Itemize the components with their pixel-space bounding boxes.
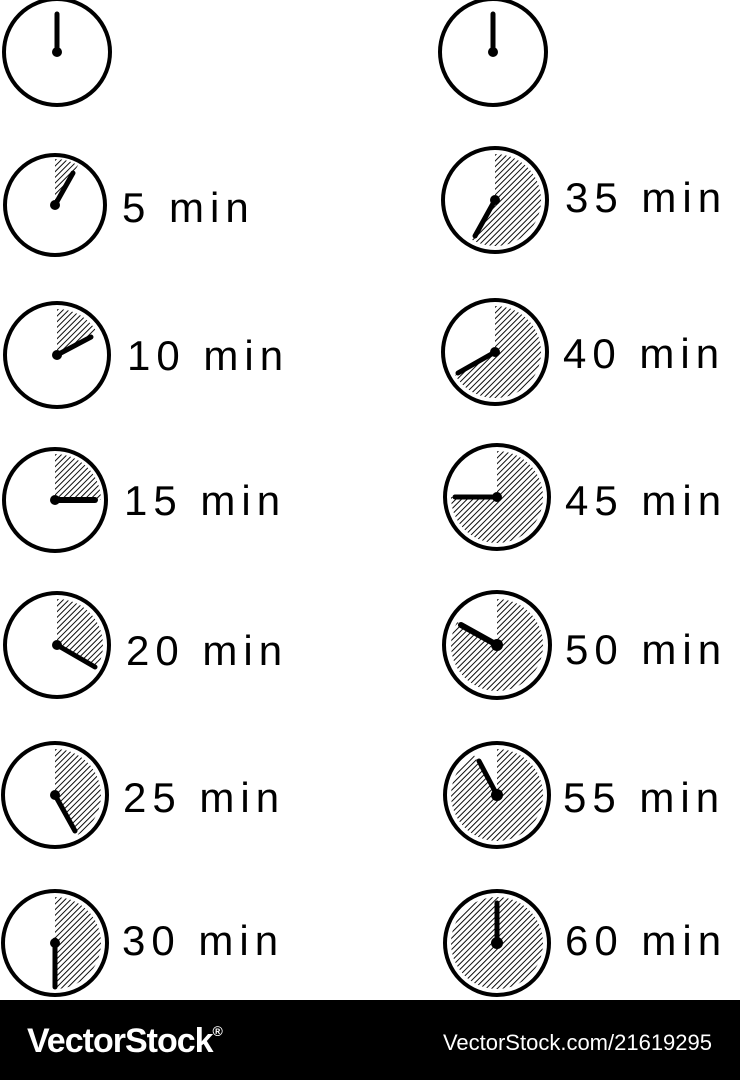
label: 35 min: 35 min	[565, 174, 727, 221]
label: 60 min: 60 min	[565, 917, 727, 964]
clock: 25 min	[3, 743, 107, 847]
footer bar	[0, 1000, 740, 1080]
clock: 50 min	[444, 592, 550, 698]
label: 30 min: 30 min	[122, 917, 284, 964]
label: 25 min: 25 min	[123, 774, 285, 821]
clock: 0 left	[4, 0, 110, 105]
label: 45 min: 45 min	[565, 477, 727, 524]
footer brand: VectorStock	[27, 1022, 213, 1060]
label: 10 min: 10 min	[127, 332, 289, 379]
clock: 45 min	[445, 445, 549, 549]
clock: 20 min	[5, 593, 109, 697]
label: 55 min: 55 min	[563, 774, 725, 821]
clock: 0 right	[440, 0, 546, 105]
clock: 15 min	[4, 449, 106, 551]
footer brand: ®	[213, 1023, 224, 1039]
label: 15 min: 15 min	[124, 477, 286, 524]
clock: 10 min	[5, 303, 109, 407]
footer url: VectorStock.com/21619295	[443, 1030, 712, 1055]
clock: 55 min	[445, 743, 549, 847]
label: 50 min: 50 min	[565, 626, 727, 673]
label: 20 min: 20 min	[126, 627, 288, 674]
clock: 30 min	[3, 891, 107, 995]
clock: 60 min	[445, 891, 549, 995]
label: 5 min: 5 min	[122, 184, 255, 231]
label: 40 min: 40 min	[563, 330, 725, 377]
clock: 40 min	[443, 300, 547, 404]
clock: 5 min	[5, 155, 105, 255]
clock: 35 min	[443, 148, 547, 252]
